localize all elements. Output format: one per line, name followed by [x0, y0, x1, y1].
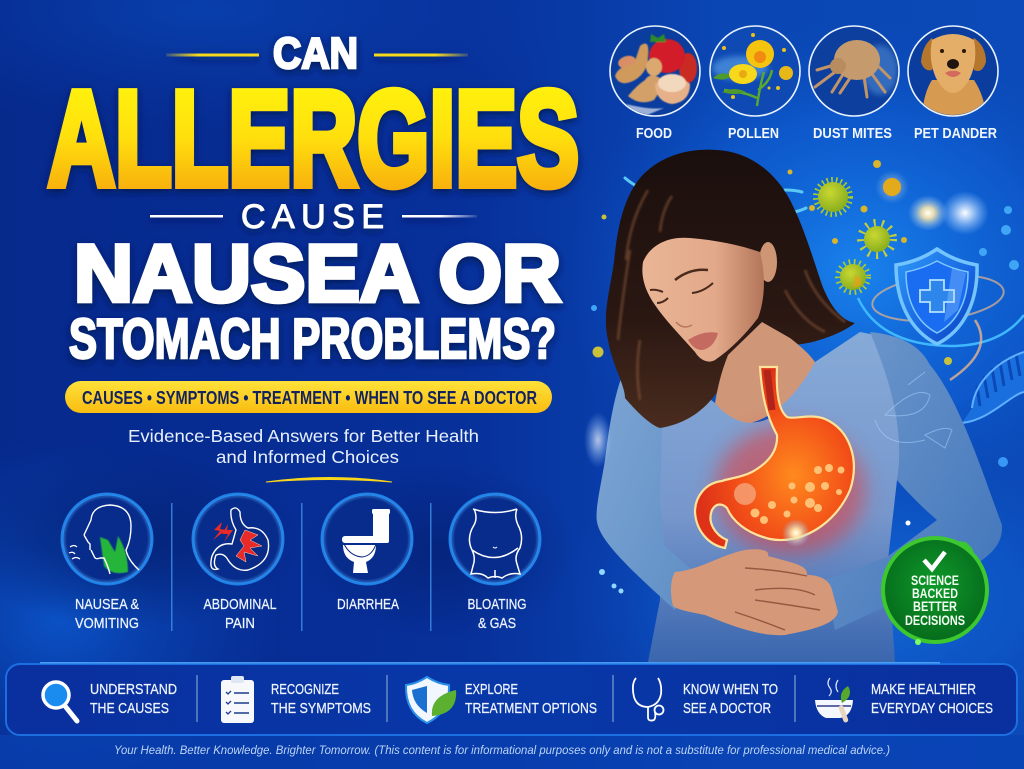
item: make healthier everyday choices: MAKE HEALTHIER	[871, 682, 976, 698]
science backed badge	[883, 537, 987, 645]
allergen: dust mites	[809, 26, 899, 116]
symptom: abdominal pain: ABDOMINAL	[204, 597, 276, 613]
subtitle	[128, 426, 479, 467]
allergen: pet dander	[908, 26, 998, 116]
science backed badge: BETTER	[913, 599, 957, 614]
allergen: pollen	[710, 26, 800, 116]
symptom: nausea and vomiting: VOMITING	[75, 616, 139, 632]
science backed badge: BACKED	[912, 586, 958, 601]
neck	[715, 322, 815, 423]
allergen labels: POLLEN	[728, 126, 779, 142]
item: recognize the symptoms	[221, 676, 371, 723]
topics pill: CAUSES • SYMPTOMS • TREATMENT • WHEN TO SEE A DOCTOR	[82, 388, 537, 408]
item: understand the causes	[43, 682, 177, 721]
floating dots	[599, 457, 1008, 594]
title: CAN	[166, 29, 468, 78]
symptom: diarrhea: DIARRHEA	[337, 597, 399, 613]
item: explore treatment options: TREATMENT OPTIONS	[465, 701, 597, 717]
allergen particles	[591, 160, 1019, 365]
footer disclaimer: Your Health. Better Knowledge. Brighter Tomorrow. (This content is for informational purposes only and is not a substitute for professional medical advice.)	[114, 743, 890, 757]
stomach glow	[715, 425, 865, 555]
title: STOMACH PROBLEMS?: STOMACH PROBLEMS?	[69, 307, 556, 371]
glowing stomach	[695, 367, 854, 548]
woman holding her stomach	[597, 150, 1002, 662]
yellow swoosh	[266, 478, 392, 482]
symptom: bloating and gas: BLOATING	[468, 597, 526, 613]
symptom: abdominal pain: PAIN	[225, 616, 255, 632]
symptom: nausea and vomiting: NAUSEA &	[75, 597, 139, 613]
item: know when to see a doctor: SEE A DOCTOR	[683, 701, 771, 717]
DNA print on sleeve	[875, 372, 952, 448]
item: know when to see a doctor	[633, 678, 778, 721]
title: ALLERGIES: ALLERGIES	[48, 63, 579, 214]
allergen labels: FOOD	[636, 126, 672, 142]
ear	[759, 242, 777, 282]
item: understand the causes: UNDERSTAND	[90, 682, 177, 698]
item: recognize the symptoms: THE SYMPTOMS	[271, 701, 371, 717]
right arm	[826, 332, 1002, 630]
torso	[628, 332, 915, 662]
hair	[606, 150, 855, 428]
item: recognize the symptoms: RECOGNIZE	[271, 682, 339, 698]
symptom: bloating and gas	[450, 494, 540, 632]
allergen labels: DUST MITES	[813, 126, 892, 142]
DNA helix	[962, 352, 1024, 423]
item: understand the causes: THE CAUSES	[90, 701, 169, 717]
science backed badge: SCIENCE	[911, 573, 959, 588]
topics pill	[65, 381, 552, 413]
item: know when to see a doctor: KNOW WHEN TO	[683, 682, 778, 698]
title: CAN: CAN	[273, 29, 358, 78]
symptom: diarrhea	[322, 494, 412, 613]
hands	[671, 549, 838, 635]
symptom: bloating and gas: & GAS	[478, 616, 516, 632]
allergen: food	[610, 26, 700, 118]
face	[642, 238, 764, 362]
facial features	[650, 270, 718, 350]
item: make healthier everyday choices: EVERYDAY CHOICES	[871, 701, 993, 717]
hair highlights	[618, 190, 845, 400]
protective shield with rings	[858, 249, 1024, 380]
divider	[430, 503, 432, 631]
light flare left	[584, 412, 612, 468]
symptom: nausea and vomiting	[62, 494, 152, 632]
subtitle: Evidence-Based Answers for Better Health	[128, 426, 479, 446]
allergen labels: PET DANDER	[914, 126, 997, 142]
title: NAUSEA OR: NAUSEA OR	[74, 229, 561, 319]
item: explore treatment options	[406, 677, 597, 723]
title: CAUSE: CAUSE	[241, 198, 384, 236]
bottom panel	[6, 662, 1017, 735]
subtitle: and Informed Choices	[216, 447, 399, 467]
divider	[171, 503, 172, 631]
allergen labels	[636, 126, 997, 142]
item: make healthier everyday choices	[815, 678, 993, 723]
item: explore treatment options: EXPLORE	[465, 682, 518, 698]
science backed badge: DECISIONS	[905, 613, 965, 628]
left arm	[597, 360, 692, 610]
symptom: abdominal pain	[193, 494, 283, 632]
divider	[301, 503, 302, 631]
